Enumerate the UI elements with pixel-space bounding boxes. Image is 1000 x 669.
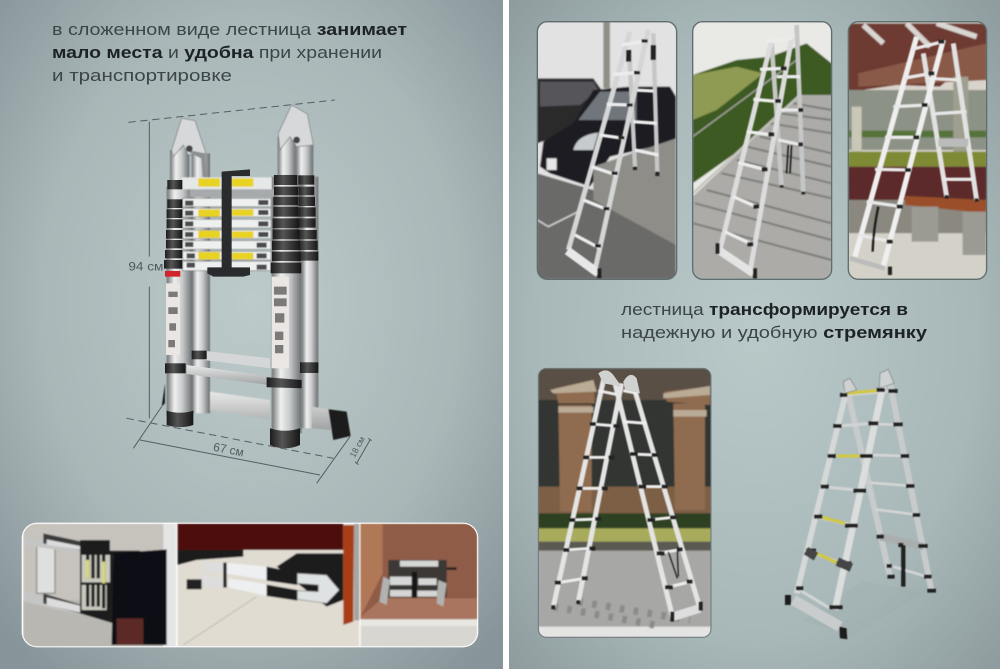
divider gap [503, 0, 509, 669]
rear rails [845, 375, 936, 592]
front rails [167, 137, 302, 433]
photo: ladder under furniture [178, 524, 359, 647]
height label: 94 см [128, 259, 163, 273]
width label: 67 см [212, 440, 245, 459]
top photo row [537, 22, 987, 280]
heading: stepladder description [621, 300, 928, 342]
panel: folded ladder [0, 0, 503, 669]
storage photo strip [22, 523, 478, 647]
folding strap and handle [207, 169, 250, 277]
lower photos and ladder [538, 368, 936, 639]
photo: stepladder by fence [538, 368, 711, 638]
heading: folded ladder description: мало места и удобна при хранении [52, 43, 382, 62]
photo: ladder by computer [23, 524, 176, 647]
heading: folded ladder description: и транспортировке [52, 66, 232, 85]
ladder shadow [803, 580, 923, 637]
heading: folded ladder description [52, 20, 407, 85]
photo: ladder in pergola garden [848, 22, 987, 280]
rungs [182, 177, 275, 271]
cutout: stepladder [785, 369, 936, 639]
lower rungs [187, 351, 270, 385]
photo: ladder against wall by car [537, 22, 677, 279]
photo: ladder on stairs [693, 22, 832, 279]
warning stickers and red mark [165, 271, 289, 368]
front rails [785, 377, 885, 639]
heading: stepladder description: надежную и удобную стремянку [621, 323, 928, 342]
hinge plates [172, 105, 313, 177]
heading: folded ladder description: в сложенном виде лестница занимает [52, 20, 407, 39]
dimension lines [127, 100, 372, 483]
lower bands and feet [165, 351, 318, 448]
black bands [164, 175, 318, 273]
heading: stepladder description: лестница трансформируется в [621, 300, 908, 319]
photo: ladder in cupboard [361, 524, 477, 647]
panel: transforms into stepladder [509, 0, 1000, 669]
depth label: 18 см [348, 435, 367, 459]
diagram: folded ladder with dimensions [127, 100, 372, 483]
back rails [162, 145, 351, 440]
